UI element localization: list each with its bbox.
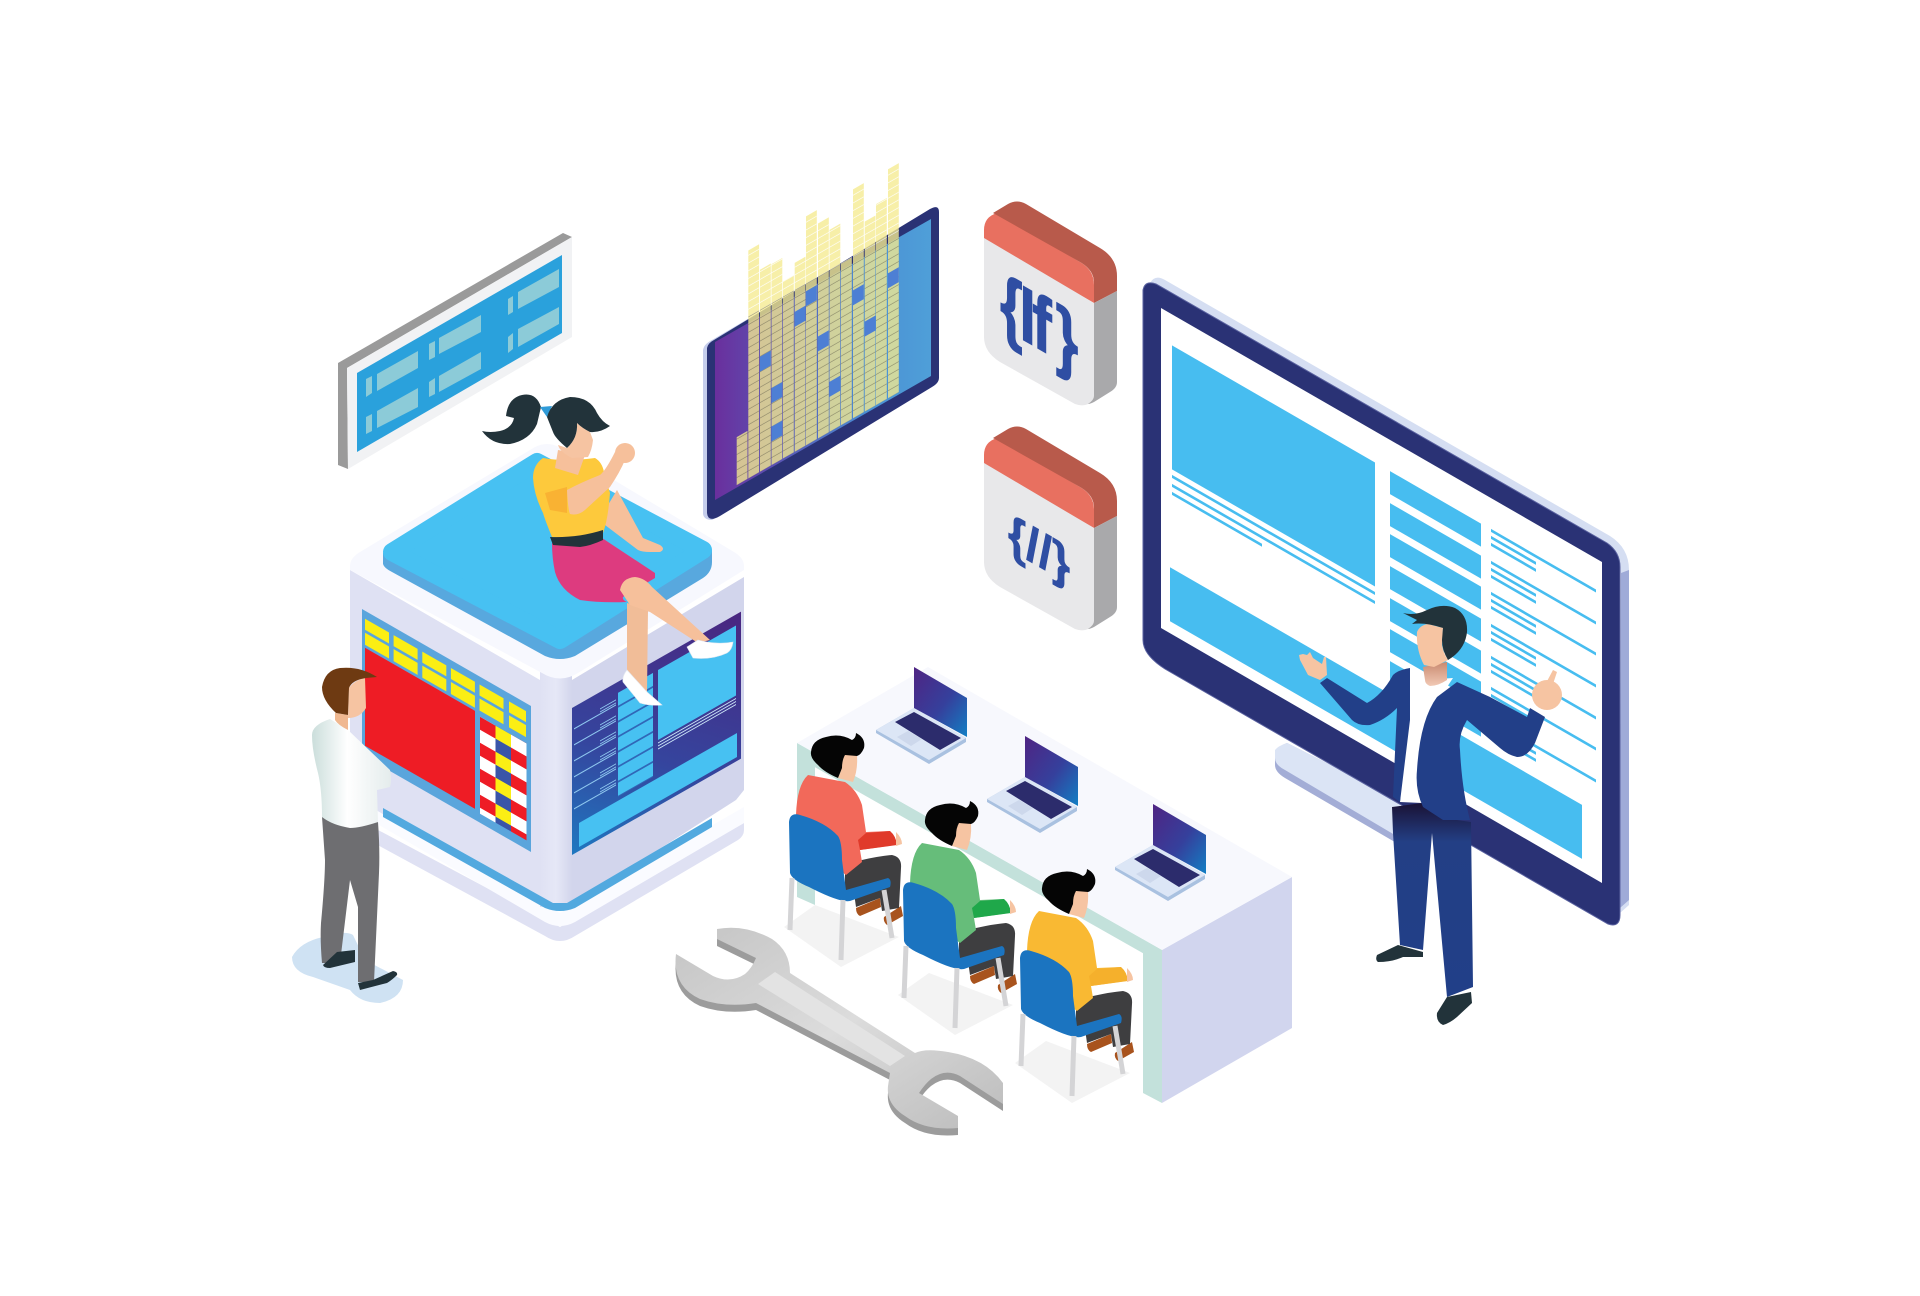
desk legs [797, 743, 815, 905]
wrench [676, 928, 1003, 1136]
trousers [321, 817, 379, 982]
hands [1299, 652, 1562, 710]
shoes [687, 640, 733, 658]
screen layout [1170, 344, 1596, 867]
blue top slab [383, 462, 712, 659]
hair [322, 668, 377, 715]
skirt [552, 538, 655, 602]
shoes [1376, 945, 1423, 962]
monitor rim and side [1150, 278, 1629, 913]
belt [550, 530, 603, 547]
neck [555, 450, 585, 475]
neck [1423, 662, 1447, 686]
face [558, 423, 593, 458]
large desktop monitor [1143, 278, 1629, 925]
monitor body [707, 207, 939, 519]
face [348, 678, 366, 718]
laptop 3 [1115, 804, 1206, 901]
monitor screen [1161, 308, 1602, 883]
monitor stand base [1275, 743, 1400, 845]
floor shadow [292, 933, 403, 1003]
shirt [312, 719, 391, 828]
monitor rim [703, 212, 930, 520]
legs [627, 603, 648, 693]
shoes [323, 950, 355, 968]
equalizer columns [737, 163, 899, 485]
calendar icon: If [984, 202, 1117, 405]
wall panel: schedule board [338, 233, 572, 469]
shirt [1400, 668, 1453, 803]
desk end face [1162, 877, 1292, 1103]
laptop 2 [987, 736, 1078, 833]
desk front strip [797, 743, 1162, 964]
suit trousers [1392, 803, 1473, 997]
web layout screen [572, 612, 741, 855]
column grid lines [748, 168, 899, 317]
student in green [898, 801, 1017, 1035]
student desk [797, 667, 1292, 1103]
shirt [533, 458, 610, 538]
ponytail [482, 394, 541, 444]
cube base plate [350, 815, 744, 941]
If code label: {If} [1000, 257, 1078, 388]
hair [1403, 606, 1467, 660]
monitor screen [715, 219, 931, 500]
presenter [1299, 606, 1562, 1025]
server cube [350, 444, 744, 941]
arm resting [605, 490, 663, 552]
neck [335, 713, 348, 730]
jacket [1320, 668, 1545, 820]
student in red [784, 733, 903, 967]
man in white shirt [292, 668, 403, 1003]
cube top surface [350, 444, 744, 678]
spreadsheet screen [362, 609, 531, 852]
calendar icon: slash [984, 426, 1117, 630]
cube body [350, 570, 744, 907]
desk top [797, 667, 1292, 950]
blue base strip [383, 808, 712, 911]
highlighted cells [760, 238, 899, 448]
woman sitting on cube [482, 394, 733, 705]
slash code label: {//} [1008, 504, 1070, 595]
student in yellow [1015, 869, 1134, 1103]
laptop 1 [876, 667, 967, 764]
chart monitor [703, 163, 939, 520]
face [1417, 624, 1448, 667]
monitor frame [1143, 283, 1620, 925]
raised arm [567, 452, 625, 514]
hair [547, 397, 610, 448]
